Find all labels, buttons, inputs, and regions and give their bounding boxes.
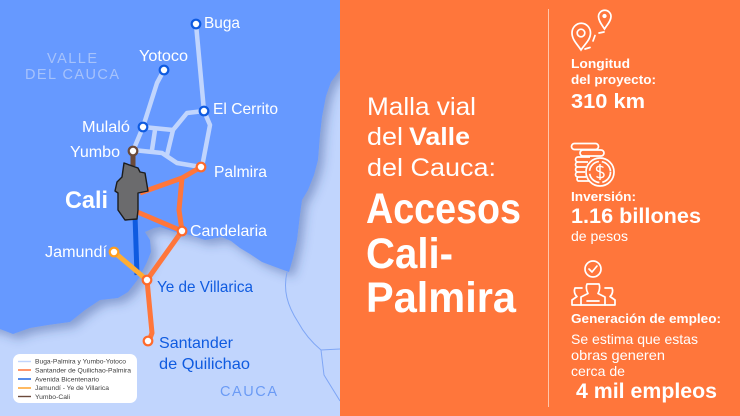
legend: Avenida Bicentenario xyxy=(35,376,99,384)
icon: map pins with route xyxy=(572,10,611,50)
text: Inversión: de pesos xyxy=(571,228,628,244)
text: Longitud del proyecto: Longitud xyxy=(571,56,630,71)
title: Malla vial del Valle del Cauca xyxy=(367,93,496,182)
title: Malla vial del Valle del Cauca: del xyxy=(367,123,403,151)
region: Valle del Cauca xyxy=(0,0,345,334)
text: Inversión xyxy=(571,189,701,244)
text: Longitud del proyecto xyxy=(571,56,656,113)
city labels: Buga xyxy=(204,15,240,32)
text: Generación de empleo: Generación de empleo: xyxy=(571,311,721,326)
text: Generación de empleo: 4 mil empleos xyxy=(576,380,717,403)
legend: Jamundí - Ye de Villarica xyxy=(35,385,109,392)
text: Longitud del proyecto: 310 km xyxy=(571,91,645,113)
route: Yumbo-Cali xyxy=(130,151,136,166)
text: Generación de empleo: obras generen xyxy=(571,347,665,363)
panel: map background xyxy=(0,0,345,416)
city labels: Jamundí xyxy=(45,244,108,261)
route: Jamundí - Ye de Villarica xyxy=(114,252,147,280)
legend: Buga-Palmira y Yumbo-Yotoco xyxy=(35,358,126,366)
blue city labels: Santander xyxy=(159,335,234,352)
blue city labels xyxy=(157,279,253,373)
city markers xyxy=(110,20,208,345)
city labels: Yumbo xyxy=(70,144,120,161)
heading: Accesos Cali-Palmira: Palmira xyxy=(366,274,517,322)
icon: coins stack xyxy=(572,144,614,186)
text: Generación de empleo: cerca de xyxy=(571,363,625,379)
city labels: Candelaria xyxy=(190,223,267,240)
icon: workers with check xyxy=(572,261,615,305)
title: Malla vial del Valle del Cauca: Valle xyxy=(409,123,470,151)
divider xyxy=(548,9,550,407)
blue city labels: de Quilichao xyxy=(159,356,250,373)
map label: Valle del Cauca xyxy=(25,51,119,83)
legend: Yumbo-Cali xyxy=(35,394,71,401)
Cali urban area xyxy=(115,163,148,220)
text: Longitud del proyecto: del proyecto: xyxy=(571,72,656,87)
city labels: Yotoco xyxy=(139,48,188,65)
region borders: Cauca xyxy=(285,272,340,401)
city labels: Mulaló xyxy=(82,119,130,136)
heading: Accesos Cali-Palmira xyxy=(366,185,521,322)
route: Santander de Quilichao-Palmira xyxy=(135,167,201,341)
title: Malla vial del Valle del Cauca: Malla vial xyxy=(367,93,476,121)
legend xyxy=(13,354,137,403)
city labels: Cali xyxy=(65,187,108,214)
text: Generación de empleo xyxy=(571,311,721,403)
text: Inversión: Inversión: xyxy=(571,189,636,204)
heading: Accesos Cali-Palmira: Cali- xyxy=(366,230,453,278)
city labels xyxy=(45,15,278,261)
heading: Accesos Cali-Palmira: Accesos xyxy=(366,185,521,233)
blue city labels: Ye de Villarica xyxy=(157,279,253,296)
map label: Valle del Cauca: VALLE xyxy=(47,51,97,67)
map label: Cauca: CAUCA xyxy=(220,384,277,400)
title: Malla vial del Valle del Cauca: del Cauca: xyxy=(367,154,496,182)
city labels: El Cerrito xyxy=(213,101,278,118)
text: Generación de empleo: Se estima que estas xyxy=(571,331,698,347)
route: Avenida Bicentenario xyxy=(135,215,137,275)
legend: Santander de Quilichao-Palmira xyxy=(35,368,131,374)
city labels: Palmira xyxy=(214,164,267,181)
route network: Buga-Palmira y Yumbo-Yotoco xyxy=(133,24,210,167)
map label: Valle del Cauca: DEL CAUCA xyxy=(25,67,119,83)
text: Inversión: 1.16 billones xyxy=(571,205,701,228)
